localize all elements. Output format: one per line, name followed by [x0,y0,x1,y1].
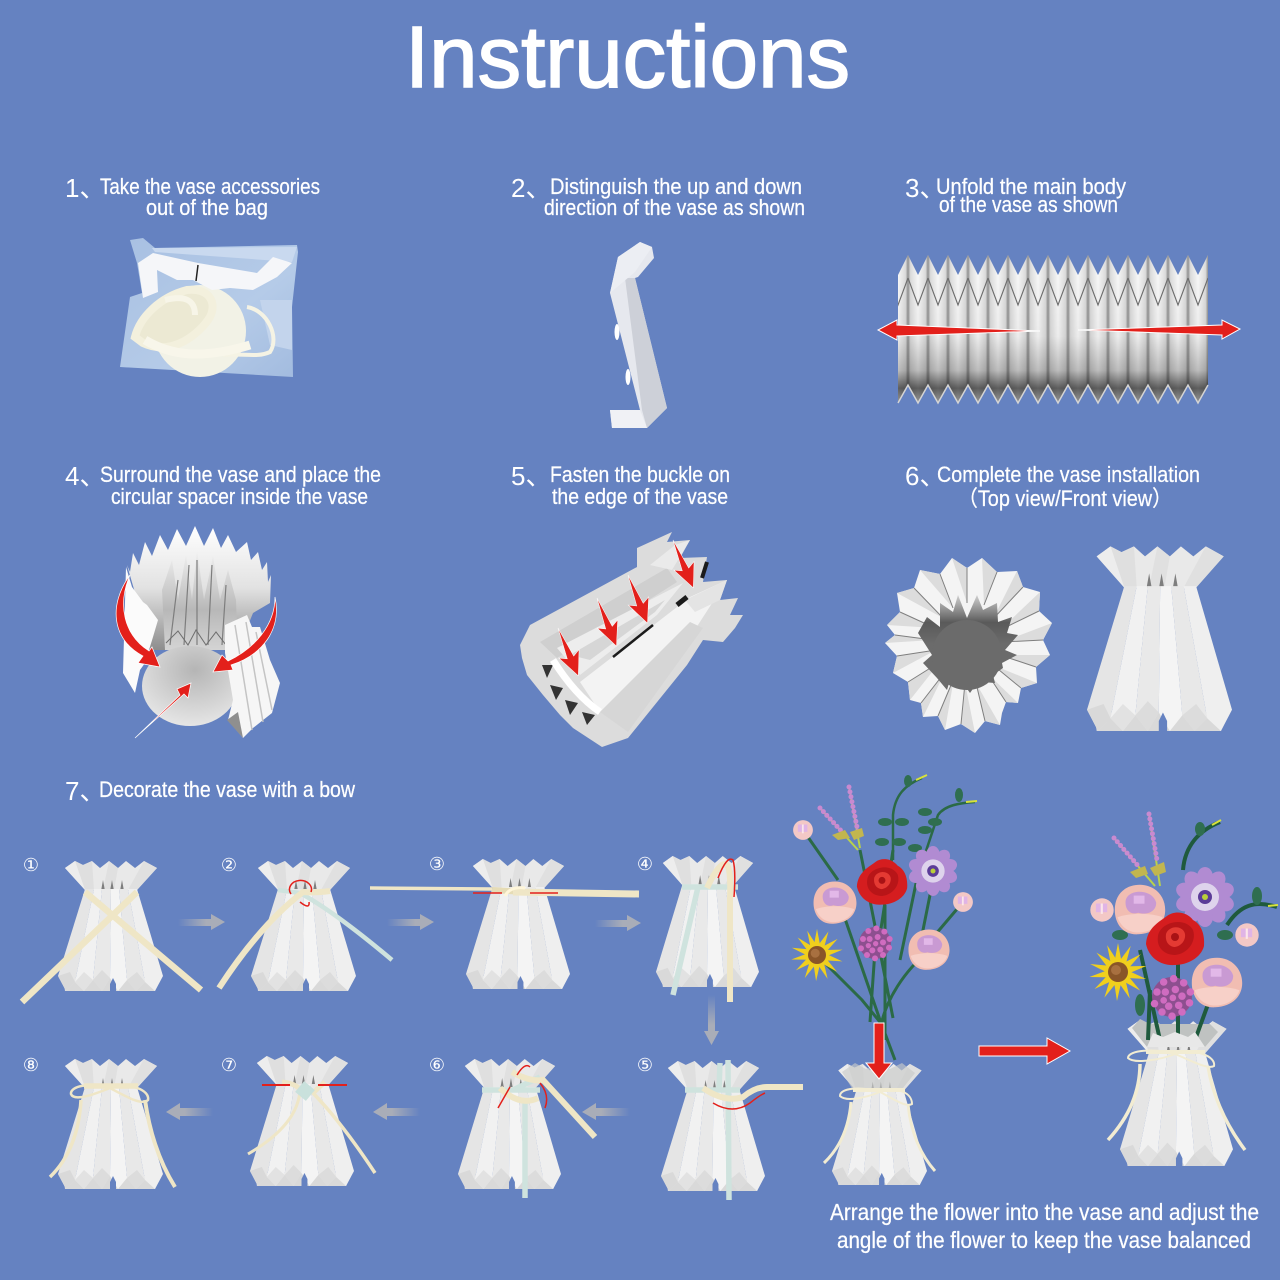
bow step 3 [370,854,639,989]
step 7 heading: Decorate the vase with a bow [99,777,355,802]
step 6 heading [905,461,1200,511]
arrow: step 2 to 3 [387,914,434,930]
number 4: ④ [637,854,653,875]
vase opening [918,595,1018,693]
arrow: curved left [116,575,160,667]
step 3 heading: Unfold the main body [936,174,1126,199]
icon: vase buckle [610,242,667,428]
lavender [820,787,860,850]
step 4 heading: Surround the vase and place the [100,462,381,487]
title: Instructions [405,9,850,106]
circular spacer [142,646,238,726]
number 8: ⑧ [23,1055,39,1076]
eucalyptus left [893,778,922,860]
step 4 heading [65,461,381,509]
step 2 heading: Distinguish the up and down [550,174,802,199]
arrow: step 1 to 2 [178,914,225,930]
arrow: buckle 4 [663,536,703,592]
bow step 5 [637,1055,803,1200]
step 2 heading: direction of the vase as shown [544,195,805,220]
arrow: step 5 to 6 [582,1103,630,1120]
arrow: step 4 to 5 [704,995,719,1045]
bag cardboard parts [138,253,292,298]
step 1 heading: out of the bag [146,195,268,220]
bow step 4 [637,854,759,1002]
number 2: ② [221,855,237,876]
number 1: ① [23,855,39,876]
step 7 heading [65,776,355,806]
arrow: buckle 1 [548,624,588,680]
bouquet flower heads [1090,898,1114,922]
step 3 heading: of the vase as shown [939,192,1118,217]
step 5 heading: 5、 [511,461,551,491]
bow step 6 [429,1055,595,1198]
vase top view [885,558,1052,733]
closing caption [830,1199,1259,1253]
step 6 heading: 6、 [905,461,945,491]
bouquet lavender [1114,814,1160,886]
bouquet above vase [791,775,977,1060]
step 6 heading: Complete the vase installation [937,462,1200,487]
number 5: ⑤ [637,1055,653,1076]
step 5 heading: Fasten the buckle on [550,462,730,487]
step 2 heading [511,173,805,220]
step 7 heading: 7、 [65,776,105,806]
arrow: buckle 2 [587,594,627,650]
folded vase band with arrows [878,255,1240,403]
vase front view [1087,546,1232,731]
step 3 heading: 3、 [905,173,945,203]
arrow: curved right [213,597,276,672]
bouquet stems [1140,822,1277,1040]
bag ribbon [135,290,273,355]
step 1 heading [65,173,320,220]
arrow: step 3 to 4 [595,915,641,931]
eucalyptus right [923,802,975,860]
arrow: step 6 to 7 [373,1103,420,1120]
arrow: unfold left [878,320,1040,340]
flower heads [793,820,813,840]
arrow: flowers down into vase [866,1023,892,1079]
arrow: unfold right [1078,320,1240,339]
arrow: buckle 3 [618,571,658,627]
number 3: ③ [429,854,445,875]
arrow: result [979,1038,1070,1064]
finished bouquet in vase [1089,814,1278,1166]
stems [803,830,963,1060]
arrow: straight up [135,683,191,738]
arrow: step 7 to 8 [166,1103,213,1120]
step 2 heading: 2、 [511,173,551,203]
bow step 7 [221,1055,375,1186]
number 7: ⑦ [221,1055,237,1076]
bow step 1 [22,855,201,1002]
open vase with circular spacer [116,526,280,738]
bow step 2 [219,855,392,991]
number 6: ⑥ [429,1055,445,1076]
vase with flowers inserted position [824,1063,935,1185]
icon: accessories bag [120,238,298,377]
folded vase buckle view [520,532,743,747]
step 1 heading: Take the vase accessories [100,174,320,199]
step 6 heading: （Top view/Front view） [958,486,1172,511]
step 3 heading [905,173,1126,217]
step 4 heading: 4、 [65,461,105,491]
bow step 8 [23,1055,175,1189]
step 5 heading: the edge of the vase [552,484,728,509]
step 1 heading: 1、 [65,173,105,203]
step 4 heading: circular spacer inside the vase [111,484,368,509]
step 5 heading [511,461,730,509]
